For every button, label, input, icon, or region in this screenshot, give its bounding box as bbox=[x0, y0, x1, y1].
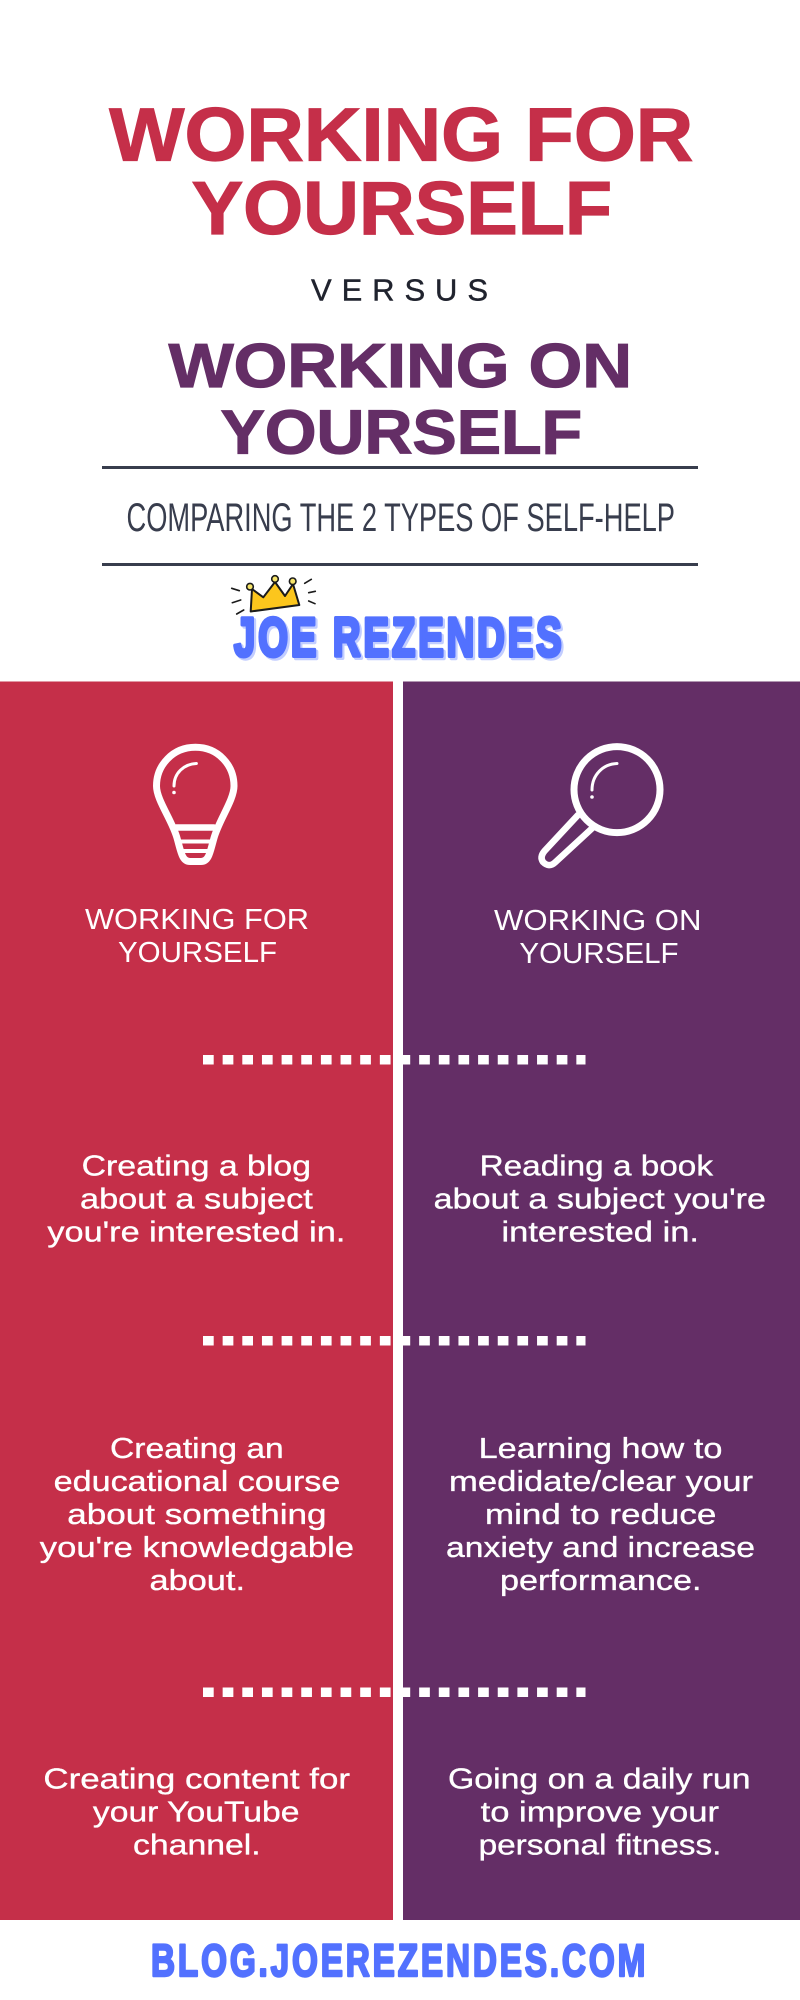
text: creating youtube content: channel. bbox=[133, 1830, 261, 1862]
logo wordmark: JOE REZENDES bbox=[234, 606, 562, 668]
text: creating a course: about. bbox=[150, 1565, 245, 1597]
text: reading a book bbox=[434, 1150, 766, 1248]
heading: working on yourself: YOURSELF bbox=[519, 938, 679, 970]
footer url: BLOG.JOEREZENDES.COM bbox=[151, 1936, 645, 1986]
text: learning to meditate: performance. bbox=[500, 1565, 702, 1597]
divider: dotted row 1 bbox=[203, 1055, 586, 1064]
text: learning to meditate bbox=[446, 1433, 755, 1597]
text: creating a course: educational course bbox=[54, 1466, 340, 1498]
title: working for yourself: WORKING FOR bbox=[109, 93, 693, 177]
text: reading a book: about a subject you're bbox=[434, 1184, 766, 1216]
text: creating a blog: you're interested in. bbox=[47, 1216, 345, 1248]
text: creating a blog bbox=[47, 1150, 345, 1248]
icon: crown bbox=[232, 576, 315, 614]
divider: dotted row 2 bbox=[203, 1336, 586, 1346]
title: working for yourself: YOURSELF bbox=[192, 166, 612, 250]
icon: light bulb bbox=[156, 747, 234, 862]
text: creating a course: about something bbox=[67, 1499, 327, 1531]
text: creating a blog: about a subject bbox=[80, 1184, 313, 1216]
divider: dotted row 3 bbox=[203, 1688, 586, 1697]
text: going on a daily run: to improve your bbox=[481, 1796, 719, 1828]
title: working for yourself bbox=[109, 93, 693, 250]
text: creating a course: you're knowledgable bbox=[40, 1532, 354, 1564]
text: going on a daily run: Going on a daily run bbox=[448, 1764, 750, 1796]
text: going on a daily run bbox=[448, 1764, 750, 1862]
panel: working for yourself bbox=[0, 682, 393, 1920]
text: learning to meditate: medidate/clear your bbox=[449, 1466, 753, 1498]
text: creating youtube content: your YouTube bbox=[93, 1796, 300, 1828]
text: learning to meditate: mind to reduce bbox=[485, 1499, 716, 1531]
heading: working for yourself: WORKING FOR bbox=[85, 904, 309, 936]
text: creating youtube content: Creating content for bbox=[43, 1764, 350, 1796]
panel: working on yourself bbox=[403, 682, 800, 1920]
text: creating a blog: Creating a blog bbox=[82, 1150, 311, 1182]
text: reading a book: interested in. bbox=[502, 1216, 699, 1248]
text: learning to meditate: anxiety and increase bbox=[446, 1532, 755, 1564]
text: going on a daily run: personal fitness. bbox=[479, 1830, 721, 1862]
versus label: VERSUS bbox=[311, 272, 488, 308]
text: reading a book: Reading a book bbox=[480, 1150, 714, 1182]
text: creating a course bbox=[40, 1433, 354, 1597]
heading: working for yourself: YOURSELF bbox=[118, 937, 277, 969]
icon: magnifying glass bbox=[542, 747, 660, 865]
heading: working on yourself bbox=[494, 905, 702, 970]
title: working on yourself bbox=[169, 331, 632, 468]
text: creating youtube content bbox=[43, 1764, 350, 1862]
text: creating a course: Creating an bbox=[110, 1433, 284, 1465]
text: learning to meditate: Learning how to bbox=[479, 1433, 722, 1465]
heading: working on yourself: WORKING ON bbox=[494, 905, 702, 937]
title: working on yourself: YOURSELF bbox=[221, 398, 582, 468]
title: working on yourself: WORKING ON bbox=[169, 331, 632, 401]
logo wordmark: JOE REZENDES bbox=[236, 608, 564, 670]
heading: working for yourself bbox=[85, 904, 309, 969]
subtitle band with rules bbox=[102, 466, 698, 566]
